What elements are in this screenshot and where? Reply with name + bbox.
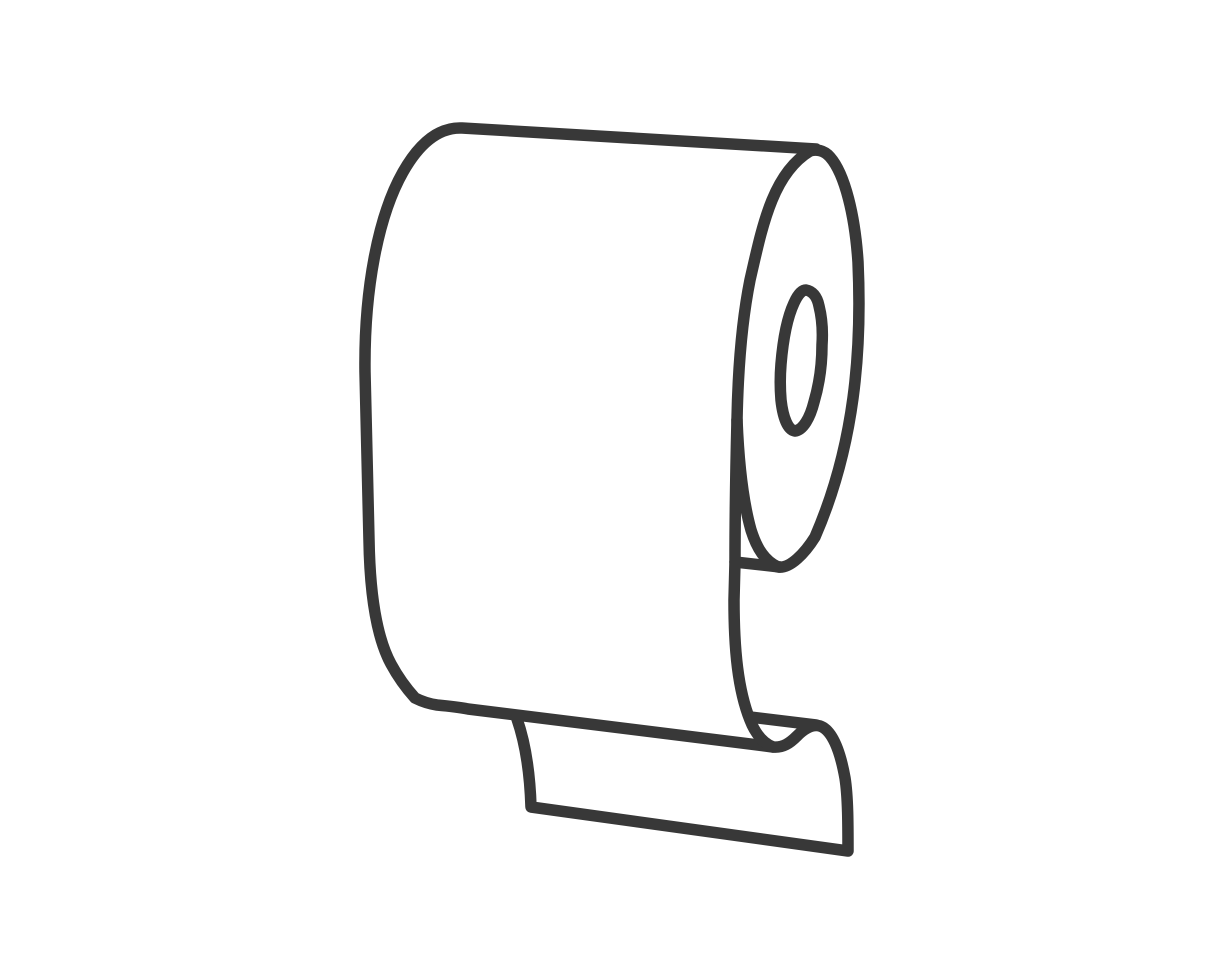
hanging sheet edge [517,420,848,851]
sheet fold line [750,717,816,725]
roll end face outer ellipse [737,150,859,567]
inner fold under roll [735,562,780,567]
roll body outline [365,128,816,747]
roll center hole [780,290,822,431]
